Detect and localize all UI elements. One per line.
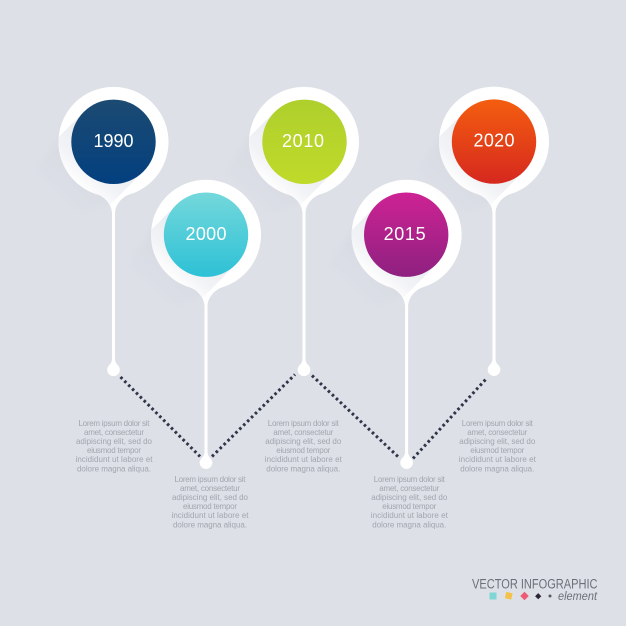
dotted connector: 2000 to 2010: [212, 374, 295, 456]
text block: 2015: Lorem ipsum dolor sit: [374, 475, 446, 484]
text block: 2015: amet, consectetur: [379, 484, 440, 493]
text block: 2000: incididunt ut labore et: [172, 511, 249, 520]
text block: 2015: incididunt ut labore et: [371, 511, 449, 520]
text block: 2020: dolore magna aliqua.: [460, 464, 534, 473]
text block: 2020: [459, 419, 537, 473]
text block: 1990: incididunt ut labore et: [76, 455, 153, 464]
text block: 1990: dolore magna aliqua.: [77, 464, 151, 473]
text block: 2010: dolore magna aliqua.: [266, 464, 340, 473]
year label: 2010: [282, 131, 324, 151]
caption sub-label: element: [558, 589, 598, 603]
text block: 1990: Lorem ipsum dolor sit: [78, 419, 150, 428]
year badge: [364, 192, 448, 277]
pin: 2010: [249, 87, 359, 376]
text block: 2015: dolore magna aliqua.: [372, 520, 446, 529]
text block: 1990: eiusmod tempor: [87, 446, 141, 455]
text block: 2020: incididunt ut labore et: [459, 455, 537, 464]
text block: 2010: incididunt ut labore et: [265, 455, 343, 464]
text block: 2020: eiusmod tempor: [470, 446, 525, 455]
text block: 2020: amet, consectetur: [467, 428, 528, 437]
text block: 2000: dolore magna aliqua.: [173, 520, 247, 529]
text block: 2010: Lorem ipsum dolor sit: [268, 419, 340, 428]
text block: 2010: eiusmod tempor: [276, 446, 331, 455]
year badge: [452, 99, 536, 184]
text block: 2000: amet, consectetur: [180, 484, 240, 493]
text block: 2000: [172, 475, 249, 529]
year badge: [262, 100, 347, 184]
text block: 1990: adipiscing elit, sed do: [76, 437, 153, 446]
pin: 1990: [58, 87, 168, 376]
text block: 2015: [371, 475, 449, 529]
legend swatches: [490, 592, 552, 600]
year label: 1990: [94, 131, 134, 151]
infographic canvas: [58, 86, 598, 600]
text block: 2000: eiusmod tempor: [183, 502, 237, 511]
brand caption: [472, 576, 598, 603]
dotted connector: 2010 to 2015: [312, 376, 400, 458]
text block: 2020: Lorem ipsum dolor sit: [462, 419, 534, 428]
text block: 1990: [76, 419, 153, 473]
text block: 2000: Lorem ipsum dolor sit: [174, 475, 246, 484]
text block: 2020: adipiscing elit, sed do: [459, 437, 536, 446]
year badge: [71, 100, 156, 184]
text block: 1990: amet, consectetur: [84, 428, 144, 437]
year badge: [164, 192, 248, 277]
text block: 2000: adipiscing elit, sed do: [172, 493, 249, 502]
year label: 2000: [186, 224, 226, 244]
pin: 2000: [151, 180, 261, 469]
text block: 2010: [265, 419, 343, 473]
caption heading: VECTOR INFOGRAPHIC: [472, 576, 598, 592]
dotted connector: 2015 to 2020: [413, 378, 487, 458]
text block: 2010: amet, consectetur: [273, 428, 334, 437]
year label: 2020: [474, 131, 514, 151]
year label: 2015: [384, 224, 426, 244]
pin: 2020: [439, 86, 549, 376]
text block: 2015: eiusmod tempor: [382, 502, 437, 511]
pin: 2015: [352, 180, 462, 469]
text block: 2010: adipiscing elit, sed do: [265, 437, 342, 446]
dotted connector: 1990 to 2000: [120, 377, 200, 456]
text block: 2015: adipiscing elit, sed do: [371, 493, 448, 502]
